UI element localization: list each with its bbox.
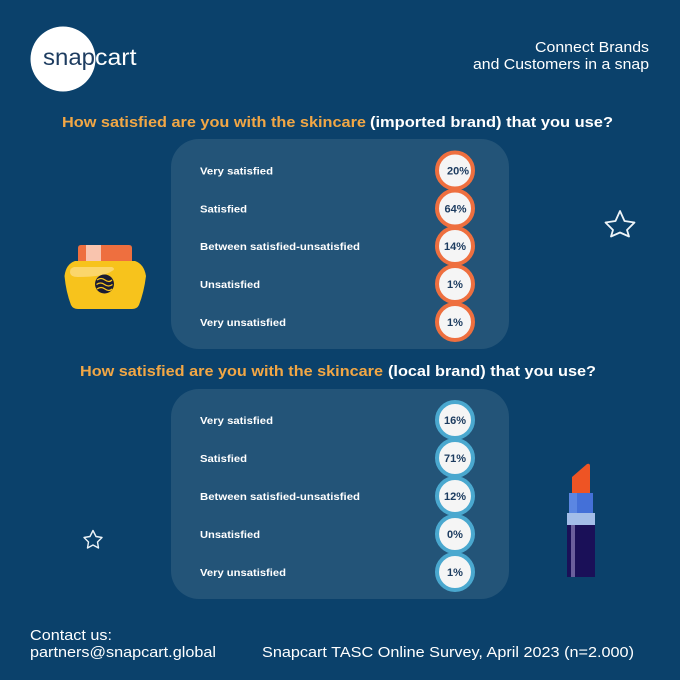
tagline: Connect Brands <box>535 40 649 56</box>
row: between: Between satisfied-unsatisfied <box>200 491 360 503</box>
row: very satisfied: 20% <box>447 166 469 178</box>
contact text <box>30 627 216 661</box>
icon: lipstick <box>567 464 595 577</box>
row: very unsatisfied: Very unsatisfied <box>200 567 286 579</box>
row: very unsatisfied <box>200 554 473 590</box>
row: satisfied: 64% <box>444 204 467 216</box>
row: unsatisfied: 1% <box>447 279 463 291</box>
panel: imported brand results <box>171 139 509 349</box>
heading: imported brand question: How satisfied are you with the skincare <box>62 114 366 131</box>
icon: skincare jar <box>64 245 146 309</box>
row: between: Between satisfied-unsatisfied <box>200 241 360 253</box>
row: very satisfied: Very satisfied <box>200 415 273 427</box>
tagline: and Customers in a snap <box>473 57 649 73</box>
row: very unsatisfied: 1% <box>447 317 463 329</box>
row: satisfied: Satisfied <box>200 204 247 216</box>
heading: local brand question: (local brand) that you use? <box>388 363 596 380</box>
row: between: 12% <box>444 491 466 503</box>
contact text: Contact us: <box>30 627 112 644</box>
row: satisfied: Satisfied <box>200 453 247 465</box>
row: very unsatisfied: Very unsatisfied <box>200 317 286 329</box>
icon: small star <box>84 530 102 548</box>
row: very unsatisfied <box>200 304 473 340</box>
row: very unsatisfied: 1% <box>447 567 463 579</box>
row: unsatisfied: Unsatisfied <box>200 279 260 291</box>
logo: snap <box>43 44 95 70</box>
logo: cart <box>95 44 137 70</box>
row: very satisfied: 16% <box>444 415 466 427</box>
row: satisfied: 71% <box>444 453 466 465</box>
row: very satisfied: Very satisfied <box>200 166 273 178</box>
row: between <box>200 478 473 514</box>
heading: local brand question <box>80 363 596 380</box>
row: unsatisfied: 0% <box>447 529 463 541</box>
tagline <box>473 40 649 73</box>
row: between: 14% <box>444 241 466 253</box>
row: unsatisfied: Unsatisfied <box>200 529 260 541</box>
panel: local brand results <box>171 389 509 599</box>
row: satisfied <box>200 440 473 476</box>
row: very satisfied <box>200 152 473 188</box>
row: unsatisfied <box>200 266 473 302</box>
row: very satisfied <box>200 402 473 438</box>
row: unsatisfied <box>200 516 473 552</box>
survey source: Snapcart TASC Online Survey, April 2023 (n=2.000) <box>262 644 634 661</box>
row: satisfied <box>200 190 473 226</box>
heading: imported brand question <box>62 114 613 131</box>
heading: local brand question: How satisfied are you with the skincare <box>80 363 383 380</box>
logo <box>30 26 137 92</box>
contact text: partners@snapcart.global <box>30 644 216 661</box>
icon: large star <box>606 211 634 236</box>
heading: imported brand question: (imported brand) that you use? <box>370 114 613 131</box>
row: between <box>200 228 473 264</box>
